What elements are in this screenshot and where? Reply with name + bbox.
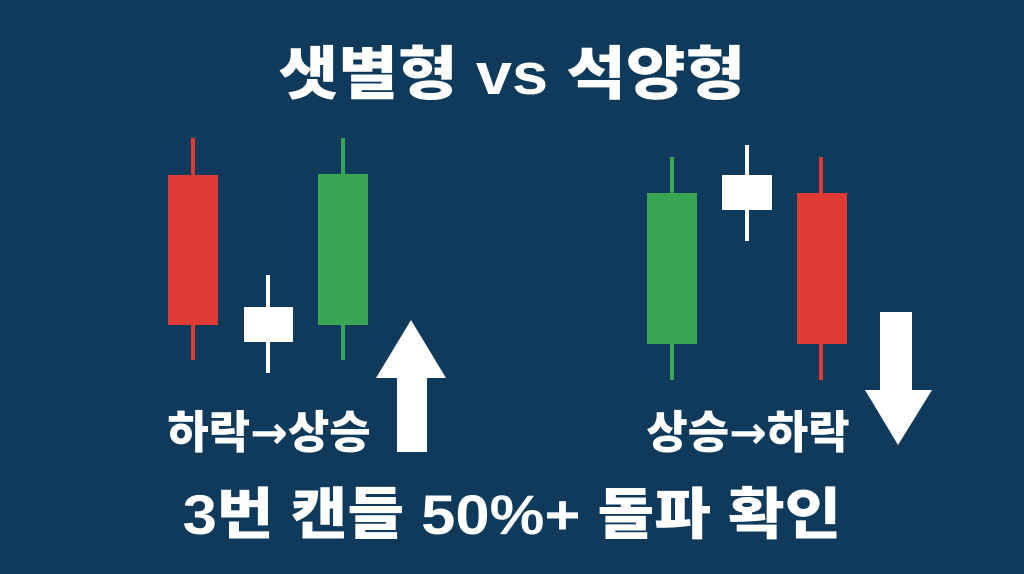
arrow: up xyxy=(376,320,446,452)
title: 샛별형 vs 석양형 xyxy=(279,42,745,107)
arrow: down xyxy=(865,312,932,445)
label: down to up: 하락→상승 xyxy=(167,406,371,459)
candle group: morning star xyxy=(168,138,368,373)
candle group: evening star xyxy=(647,145,847,380)
bottom text: 3번 캔들 50%+ 돌파 확인 xyxy=(183,483,841,546)
label: up to down: 상승→하락 xyxy=(646,406,850,459)
